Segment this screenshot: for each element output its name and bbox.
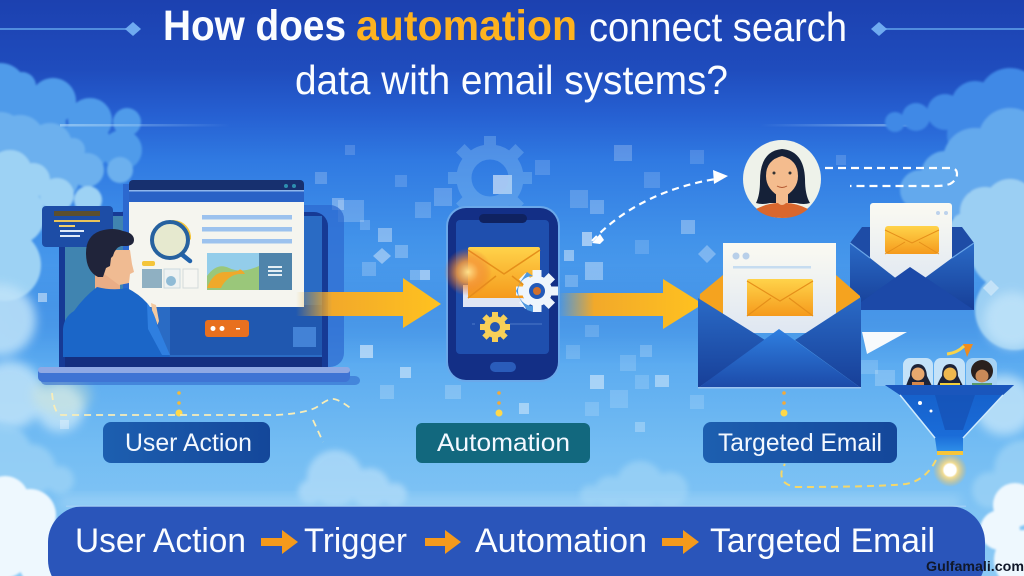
user action label: User Action [125,429,252,457]
clouds top left [0,63,142,301]
orange button [205,320,249,337]
automation label [416,423,590,463]
connector dots: automation [496,391,502,416]
dashed path: avatar loop [825,168,957,186]
arrow [425,530,461,554]
dashed path: funnel to email [781,460,936,487]
watermark: Gulfamali.com [926,558,1024,574]
targeted email label: Targeted Email [718,429,882,457]
white gear [516,270,558,312]
clouds top right [885,68,1024,350]
small orange plane [947,344,973,357]
funnel body [885,385,1014,452]
decorative data squares [38,145,999,432]
browser window [123,180,304,307]
bottom flow bar: Trigger [304,522,407,560]
phone [444,206,560,382]
laptop with user [38,180,360,385]
targeted email label [703,422,897,463]
dashed path: left flow [52,393,353,442]
envelope on phone [468,247,540,298]
title: automation [356,2,577,50]
dashed arrow: phone to avatar [592,170,728,244]
bottom flow bar: User Action [75,522,246,560]
laptop screen [59,212,328,367]
landscape image [207,253,292,290]
bottom flow bar: Targeted Email [710,522,935,560]
clouds lower [0,284,1024,435]
arrow: user action to automation [296,278,441,328]
small envelope [850,203,974,310]
background gear [448,136,532,220]
funnel glow [933,453,967,487]
magnifying glass icon [152,220,191,261]
automation label: Automation [437,429,570,457]
user action label [103,422,270,463]
letter [870,203,952,291]
title: connect search [589,4,847,50]
note card [42,206,113,247]
large envelope [698,243,861,388]
connector dots: email [780,391,788,416]
laptop shadow panel [120,205,344,367]
laptop base [38,367,360,385]
bottom flow bar: Automation [475,522,647,560]
letter [723,243,836,333]
mini envelope [885,226,939,254]
title: data with email systems? [295,57,728,103]
mail icon [747,279,813,316]
audience avatars [903,358,997,390]
thumbnails [142,261,198,288]
arrow: automation to email [558,279,703,329]
avatar: woman [743,140,821,218]
yellow gear [480,312,510,342]
connector dots: user action [176,391,182,416]
envelope body [698,297,861,388]
person [63,229,170,357]
bottom flow bar [48,506,985,576]
paper plane [862,332,907,354]
envelope front [850,243,974,310]
title: How does [163,2,346,50]
arrow [662,530,699,554]
glow spark [444,248,492,296]
funnel with audience [885,358,1014,455]
search results lines [202,215,292,244]
title [0,2,1024,103]
arrow [261,530,298,554]
